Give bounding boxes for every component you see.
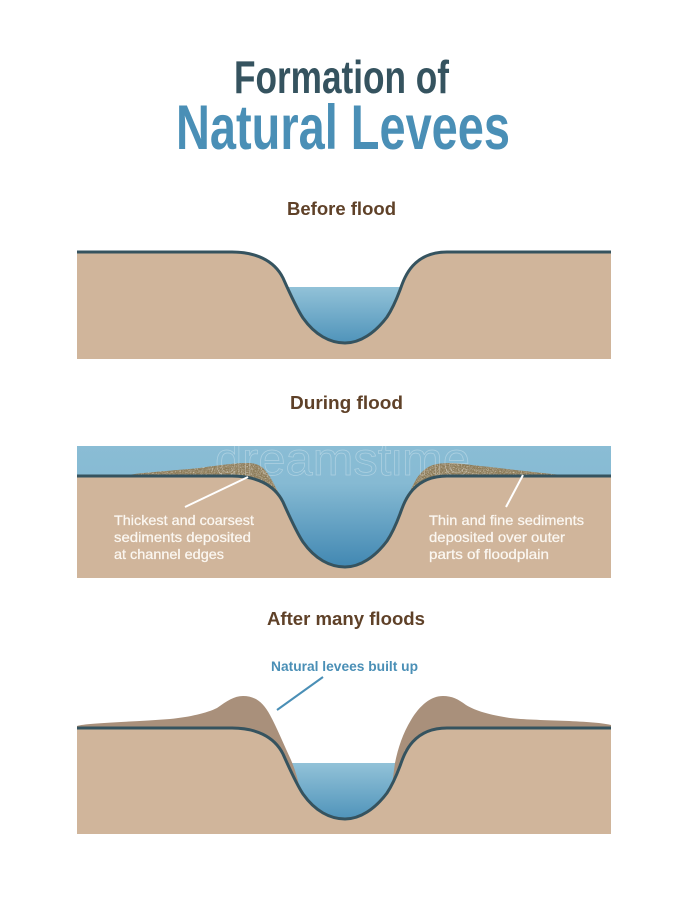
title line: Formation of: Formation of bbox=[234, 51, 450, 103]
callout: coarse sediments: Thickest and coarsest bbox=[114, 512, 254, 528]
panel: during flood bbox=[77, 393, 611, 578]
diagram: channel before flood bbox=[77, 252, 611, 359]
callout: fine sediments: parts of floodplain bbox=[429, 546, 549, 562]
callout: natural levees built up: Natural levees built up bbox=[271, 658, 418, 674]
sediment deposit: right bbox=[401, 463, 562, 514]
ground bbox=[77, 476, 611, 578]
ground surface line bbox=[77, 728, 611, 819]
callout: fine sediments: deposited over outer bbox=[429, 529, 565, 545]
ground surface line bbox=[77, 476, 611, 567]
panel: after many floods bbox=[77, 609, 611, 834]
flood water bbox=[77, 446, 611, 570]
levee: left bbox=[77, 696, 299, 785]
callout: fine sediments: Thin and fine sediments bbox=[429, 512, 584, 528]
sediment deposit: left bbox=[127, 463, 289, 514]
heading: during flood: During flood bbox=[290, 393, 403, 413]
leader line: natural levees bbox=[277, 677, 323, 710]
diagram: channel during flood bbox=[77, 433, 611, 578]
callout: coarse sediments: sediments deposited bbox=[114, 529, 251, 545]
heading: before flood: Before flood bbox=[287, 199, 396, 219]
title line: Natural Levees: Natural Levees bbox=[176, 93, 510, 163]
leader line: fine sediments bbox=[506, 475, 523, 507]
heading: after many floods: After many floods bbox=[267, 609, 425, 629]
callout: coarse sediments: at channel edges bbox=[114, 546, 224, 562]
callout: fine sediments bbox=[429, 512, 584, 562]
levee: right bbox=[392, 696, 611, 785]
water in channel bbox=[270, 287, 420, 345]
panel: before flood bbox=[77, 199, 611, 359]
water in channel bbox=[270, 763, 420, 821]
callout: coarse sediments bbox=[114, 512, 254, 562]
ground surface line bbox=[77, 252, 611, 343]
leader line: coarse sediments bbox=[185, 477, 248, 507]
diagram: channel after floods bbox=[77, 696, 611, 834]
watermark: dreamstime bbox=[215, 433, 470, 485]
ground bbox=[77, 252, 611, 359]
ground bbox=[77, 728, 611, 834]
title bbox=[176, 51, 510, 163]
